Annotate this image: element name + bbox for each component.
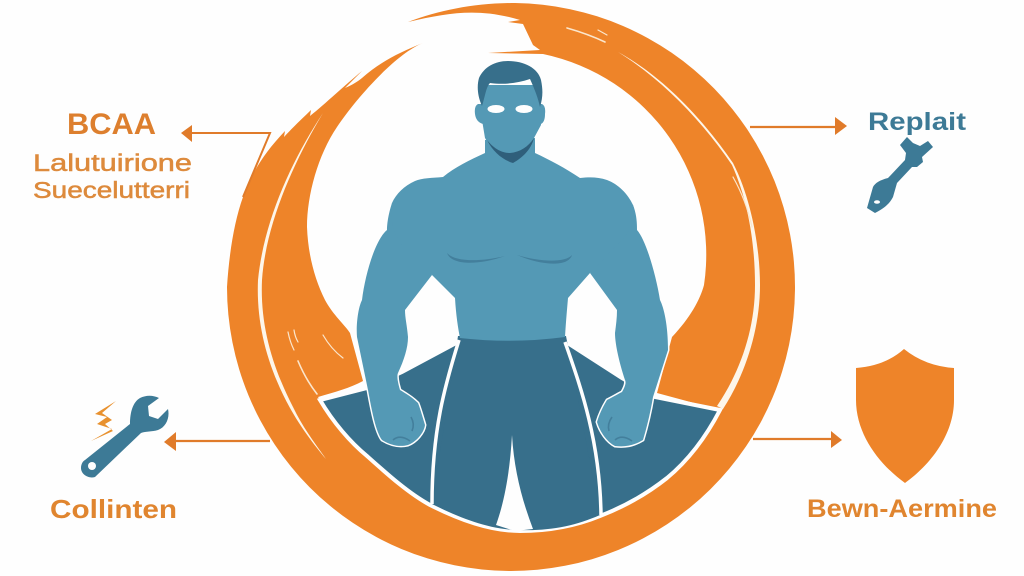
beard	[487, 138, 534, 163]
right arm	[590, 205, 668, 446]
head	[475, 61, 545, 163]
icon: lightning bolt	[91, 401, 116, 441]
arrow: to shield	[753, 431, 842, 448]
left arm	[357, 203, 432, 446]
chest lines	[447, 253, 572, 264]
arrow: to wrench	[164, 432, 270, 451]
figure	[357, 61, 668, 531]
icon: key tool	[867, 137, 933, 213]
arrow: to Replait	[750, 117, 847, 135]
label: Replait: Replait	[868, 108, 967, 136]
fist details	[393, 417, 632, 441]
torso	[391, 138, 634, 341]
icon: wrench	[81, 396, 169, 477]
ring streak: right	[618, 52, 760, 409]
label: Collinten: Collinten	[50, 494, 177, 524]
ring streak: left	[258, 113, 326, 459]
label: Bewn-Aermine: Bewn-Aermine	[807, 495, 997, 523]
heading: BCAA: BCAA	[67, 108, 156, 141]
eyes	[488, 105, 504, 113]
pants	[432, 336, 601, 531]
face	[482, 85, 541, 160]
ears	[475, 104, 545, 124]
arrow: to BCAA	[181, 125, 270, 197]
ring detail streaks	[288, 28, 752, 394]
hair	[478, 61, 542, 107]
label: Lalutuirione: Lalutuirione	[33, 150, 192, 177]
orange brush ring	[227, 3, 795, 571]
icon: shield	[856, 349, 954, 483]
dark base segment	[320, 342, 720, 531]
label: Suecelutterri: Suecelutterri	[33, 177, 190, 203]
